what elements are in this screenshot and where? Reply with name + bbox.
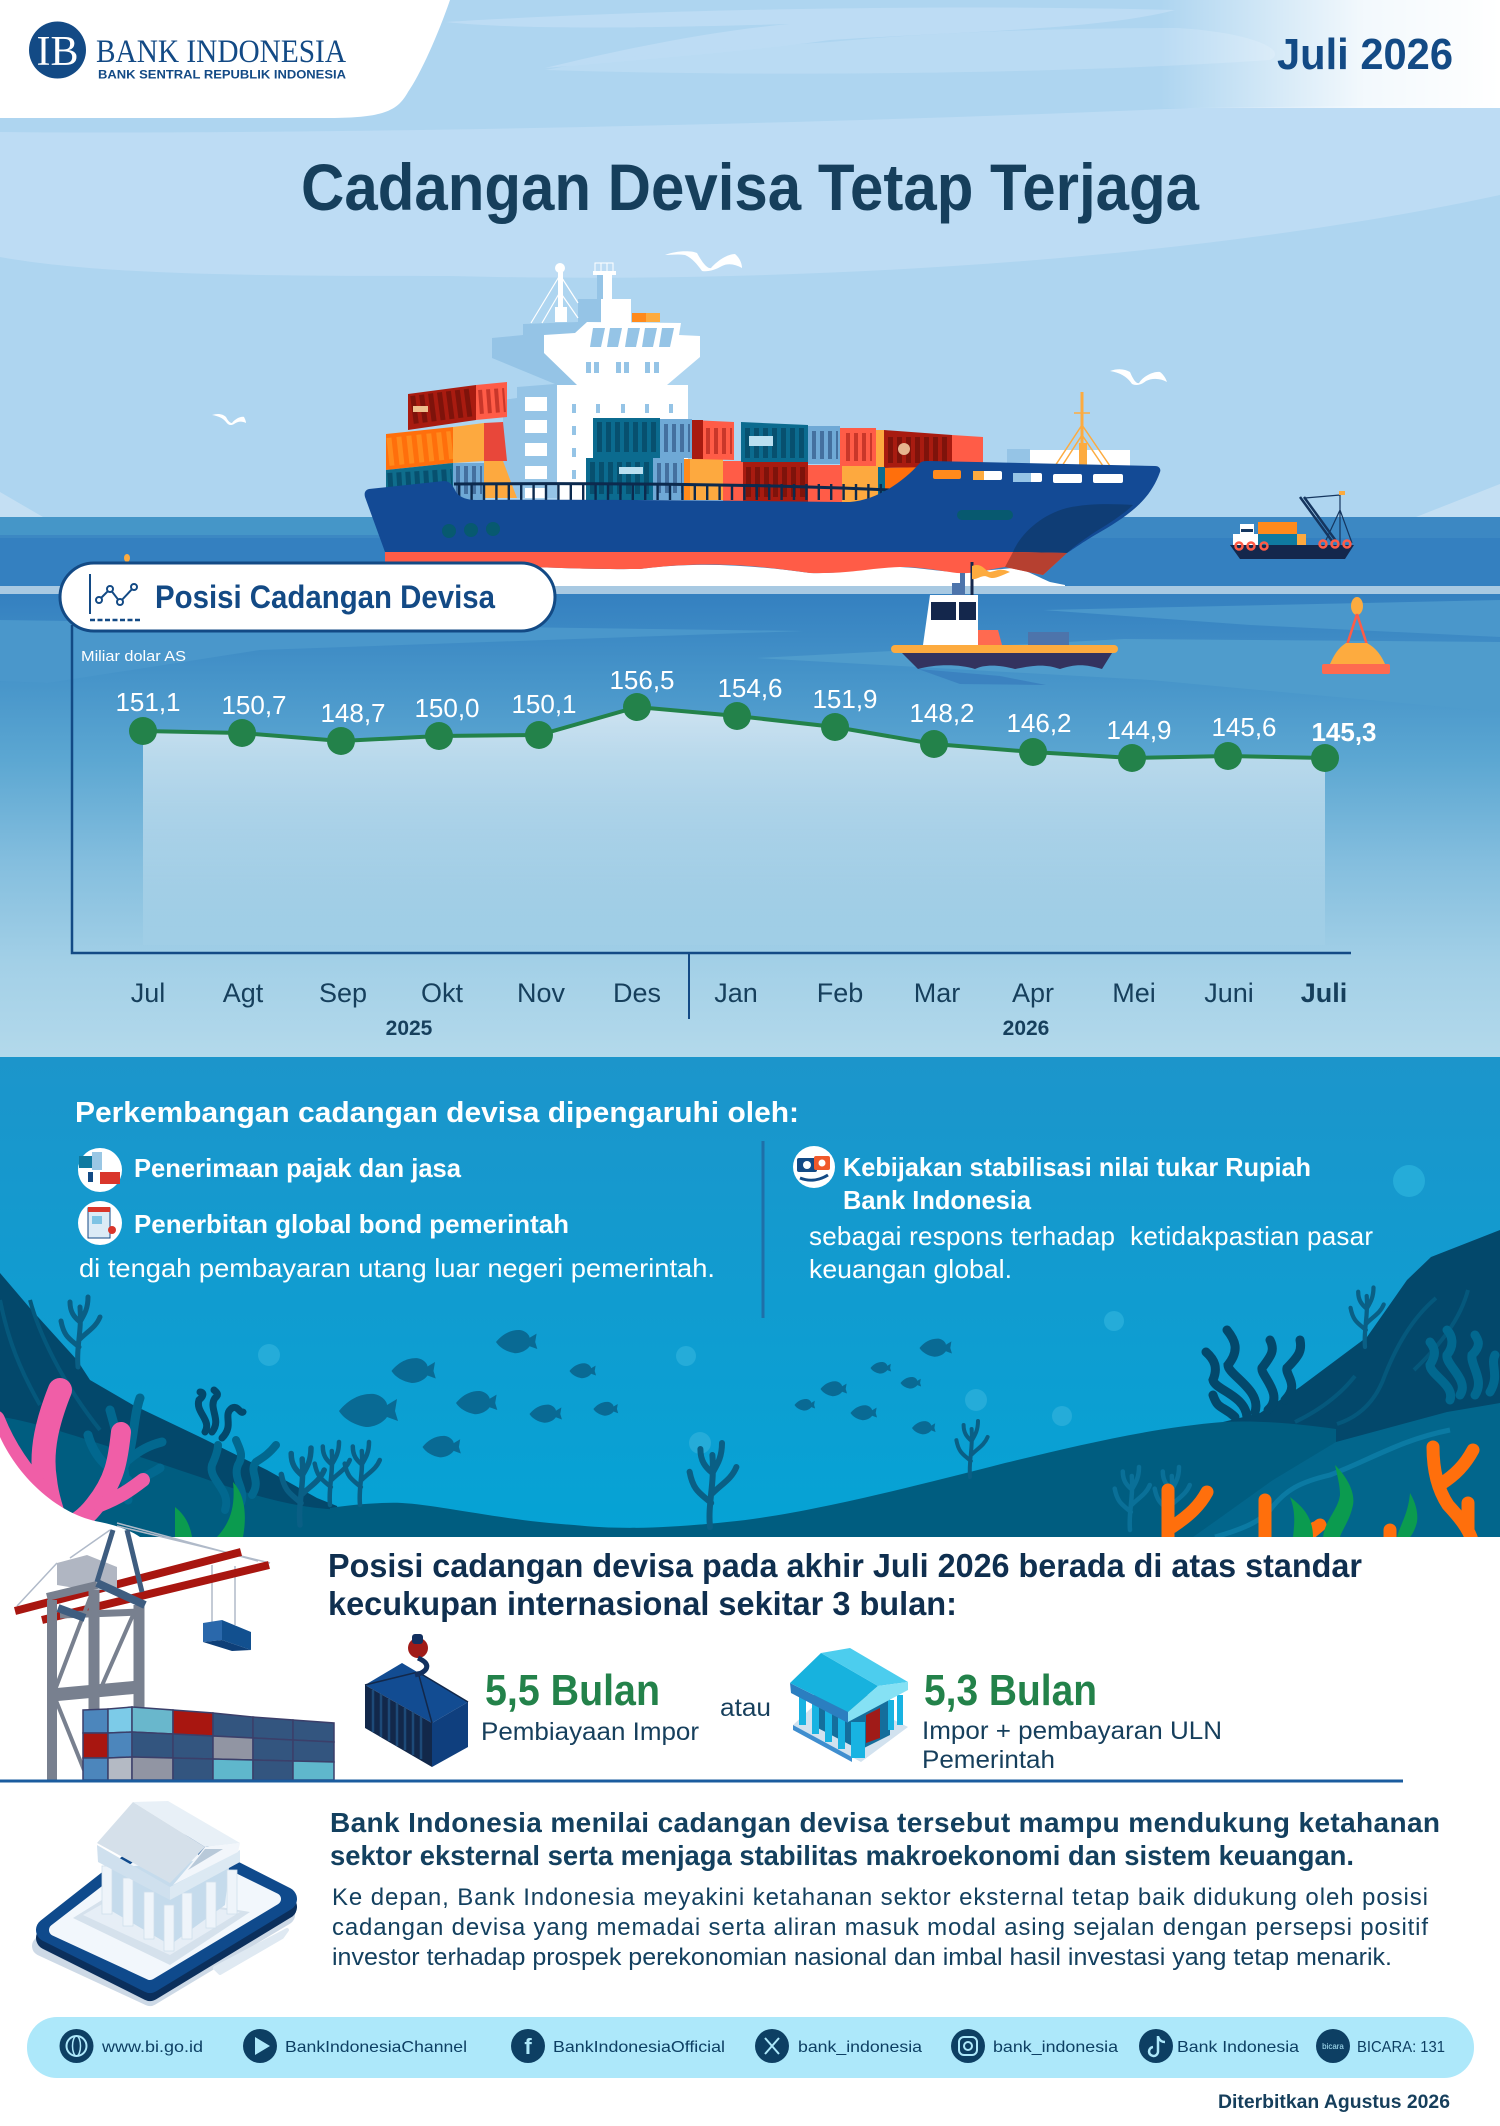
behind bow deck (1007, 392, 1130, 469)
month labels: Okt (421, 978, 463, 1008)
icon: facebook (511, 2029, 545, 2063)
crane hoist box (57, 1555, 117, 1590)
year labels (386, 1017, 1049, 1040)
chart area fill (143, 707, 1325, 945)
icon: line chart (90, 574, 142, 620)
month labels: Mei (1112, 978, 1156, 1008)
stat: impor + uln (922, 1666, 1222, 1774)
year labels: 2026 (1003, 1017, 1049, 1040)
seaweed left light (212, 1440, 276, 1510)
tug boat (891, 562, 1118, 685)
logo subtitle: BANK SENTRAL REPUBLIK INDONESIA (98, 68, 346, 82)
bubbles (258, 1165, 1425, 1454)
text: pajak: Penerimaan pajak dan jasa (134, 1153, 462, 1183)
data values: 151,9 (812, 684, 878, 714)
icon: instagram (951, 2029, 985, 2063)
month labels: Agt (223, 978, 264, 1008)
logo emblem (29, 22, 86, 78)
small buoy (124, 554, 130, 562)
logo emblem: IB (36, 29, 78, 75)
sea background (0, 484, 1500, 1057)
month labels: Jan (714, 978, 758, 1008)
branch corals (61, 1288, 1384, 1530)
container stack (83, 1707, 334, 1780)
section divider (0, 1780, 1403, 1782)
seabed middle hill (330, 1421, 1336, 1537)
data values: 146,2 (1006, 708, 1072, 738)
stat: impor (481, 1666, 699, 1746)
crane frame (47, 1585, 140, 1781)
pill label: Posisi Cadangan Devisa (155, 579, 495, 615)
assessment body (332, 1884, 1428, 1971)
instagram name: bank_indonesia (993, 2039, 1118, 2056)
data values: 145,3 (1311, 717, 1377, 747)
icon: container on hook (365, 1634, 468, 1767)
assessment heading: Bank Indonesia menilai cadangan devisa tersebut mampu mendukung ketahanan (330, 1807, 1440, 1838)
crane boom (15, 1552, 269, 1620)
label: Pembiayaan Impor (481, 1718, 699, 1746)
icon: bicara: bicara (1322, 2042, 1344, 2051)
chart axes (72, 625, 1351, 953)
ship foam (385, 565, 1065, 586)
date fade panel (1160, 0, 1500, 108)
icon: facebook: f (524, 2034, 532, 2059)
month labels: Feb (817, 978, 863, 1008)
value: 5,3 Bulan (924, 1666, 1097, 1715)
month labels: Mar (914, 978, 960, 1008)
assessment body: investor terhadap prospek perekonomian nasional dan imbal hasil investasi yang tetap menarik. (332, 1944, 1392, 1971)
bicara number: BICARA: 131 (1357, 2039, 1445, 2056)
month labels: Apr (1012, 978, 1054, 1008)
influences heading: Perkembangan cadangan devisa dipengaruhi oleh: (75, 1097, 799, 1129)
facebook name: BankIndonesiaOfficial (553, 2039, 725, 2056)
label line 2: Pemerintah (922, 1746, 1055, 1774)
year divider (688, 953, 690, 1019)
month labels: Sep (319, 978, 367, 1008)
month labels: Juni (1204, 978, 1254, 1008)
white lower background (0, 1437, 1500, 2126)
logo name: BANK INDONESIA (96, 34, 346, 70)
crane illustration (15, 1523, 334, 1781)
green seaweed (175, 1465, 1417, 1537)
icon: tiktok (1139, 2029, 1173, 2063)
crane cables (17, 1523, 270, 1625)
icon: youtube (243, 2029, 277, 2063)
youtube name: BankIndonesiaChannel (285, 2039, 467, 2056)
ship hull (365, 461, 1160, 553)
hill streaks (1295, 1290, 1468, 1424)
text: bank indonesia: Bank Indonesia (843, 1185, 1032, 1215)
seaweed right light (1430, 1330, 1495, 1400)
footer contact bar (27, 2017, 1474, 2078)
small cargo ship (1230, 491, 1354, 559)
text: respons: sebagai respons terhadap ketidakpastian pasar (809, 1221, 1373, 1251)
logo panel (0, 0, 450, 118)
chart heading pill (60, 563, 555, 631)
icon: tax (78, 1148, 122, 1192)
seabed left hill (0, 1273, 350, 1537)
month labels (131, 978, 1347, 1008)
influences right (793, 1146, 1373, 1284)
data values: 156,5 (609, 665, 675, 695)
icon: bond (78, 1201, 122, 1245)
bow hatch (1005, 552, 1067, 575)
seabed right hill (1193, 1403, 1500, 1537)
label line 1: Impor + pembayaran ULN (922, 1717, 1222, 1745)
data values: 148,2 (909, 698, 975, 728)
hanging container (203, 1620, 251, 1651)
data values: 145,6 (1211, 712, 1277, 742)
seaweed left (198, 1390, 243, 1438)
reserve adequacy heading: Posisi cadangan devisa pada akhir Juli 2026 berada di atas standar (328, 1547, 1362, 1584)
x name: bank_indonesia (798, 2039, 922, 2056)
panel divider (762, 1141, 764, 1318)
date: Juli 2026 (1277, 30, 1453, 79)
bird large (665, 251, 742, 271)
bird left (212, 414, 246, 425)
cargo ship (365, 263, 1160, 586)
ship containers (386, 382, 983, 502)
year labels: 2025 (386, 1017, 433, 1040)
soft corals left (88, 1398, 162, 1500)
text: atau: atau (720, 1694, 771, 1722)
portholes (442, 510, 1013, 538)
assessment heading: sektor eksternal serta menjaga stabilitas makroekonomi dan sistem keuangan. (330, 1840, 1354, 1871)
assessment body: Ke depan, Bank Indonesia meyakini ketahanan sektor eksternal tetap baik didukung oleh posisi (332, 1884, 1428, 1911)
data values: 150,1 (511, 689, 577, 719)
illustration: bank on tablet (42, 1801, 287, 1996)
data values: 151,1 (115, 687, 181, 717)
data values: 154,6 (717, 673, 783, 703)
orange coral (1168, 1447, 1473, 1540)
assessment body: cadangan devisa yang memadai serta aliran masuk modal asing sejalan dengan persepsi positif (332, 1914, 1428, 1941)
data values: 144,9 (1106, 715, 1172, 745)
data values (115, 665, 1377, 747)
hill current streak (1215, 1430, 1450, 1537)
tiktok name: Bank Indonesia (1177, 2039, 1299, 2056)
icon: web (60, 2029, 94, 2063)
text: utang: di tengah pembayaran utang luar negeri pemerintah. (79, 1253, 715, 1283)
data values: 150,7 (221, 690, 287, 720)
icon: exchange (793, 1146, 835, 1188)
publication date: Diterbitkan Agustus 2026 (1218, 2092, 1450, 2113)
chart: posisi cadangan devisa (72, 625, 1377, 1040)
sky background (0, 0, 1500, 530)
unit label: Miliar dolar AS (81, 648, 186, 665)
data values: 150,0 (414, 693, 480, 723)
web address: www.bi.go.id (101, 2039, 203, 2056)
fish school left (339, 1330, 618, 1457)
seaweed right dark (1206, 1330, 1301, 1417)
reserve adequacy heading (328, 1547, 1362, 1622)
reserve adequacy heading: kecukupan internasional sekitar 3 bulan: (328, 1585, 957, 1622)
pink coral (0, 1390, 143, 1535)
month labels: Jul (131, 978, 165, 1008)
month labels: Juli (1301, 978, 1347, 1008)
icon: bicara (1316, 2029, 1350, 2063)
bird right (1110, 369, 1167, 385)
value: 5,5 Bulan (485, 1666, 660, 1715)
navigation buoy (1322, 597, 1390, 674)
bow shade (1013, 504, 1133, 553)
text: bond: Penerbitan global bond pemerintah (134, 1209, 569, 1239)
ship superstructure (492, 263, 700, 500)
icon: blue bank (790, 1648, 908, 1762)
seabed right dark hill (1223, 1230, 1500, 1537)
assessment heading (330, 1807, 1440, 1871)
fish school right (794, 1339, 952, 1434)
sky cloud bands (0, 8, 1500, 278)
hull red waterline (385, 552, 1067, 575)
icon: x (755, 2029, 789, 2063)
text: global: keuangan global. (809, 1254, 1012, 1284)
month labels: Nov (517, 978, 566, 1008)
data points (129, 693, 1339, 772)
text: kebijakan: Kebijakan stabilisasi nilai tukar Rupiah (843, 1152, 1311, 1182)
data line (143, 707, 1325, 758)
ship railing (454, 484, 890, 490)
bow windows (933, 470, 1123, 483)
influences left (78, 1148, 715, 1283)
data values: 148,7 (320, 698, 386, 728)
title: Cadangan Devisa Tetap Terjaga (301, 150, 1200, 224)
month labels: Des (613, 978, 661, 1008)
underwater panel (0, 1057, 1500, 1540)
